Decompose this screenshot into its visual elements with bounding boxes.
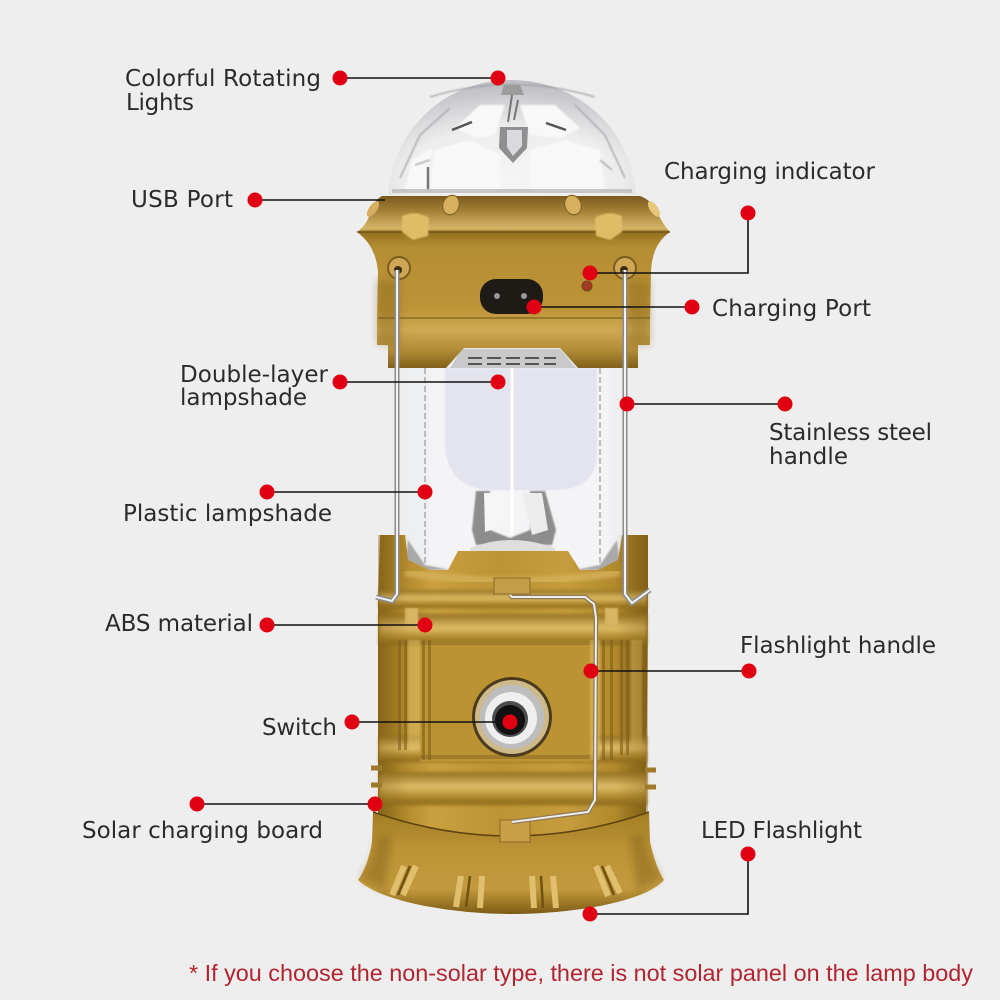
callout: colorful rotating lights (125, 66, 506, 116)
callout: colorful rotating lights: Colorful Rotating (125, 66, 321, 92)
glass lampshade (403, 349, 620, 570)
lantern illustration (357, 80, 670, 914)
charging port socket (480, 279, 543, 314)
flared gold base (358, 812, 664, 914)
callout: USB port (131, 187, 385, 213)
callout: solar charging board (82, 796, 382, 844)
callout: stainless steel handle (620, 396, 932, 470)
callout: flashlight handle: Flashlight handle (740, 633, 936, 659)
callout: charging port: Charging Port (712, 296, 871, 322)
dome light (388, 80, 636, 195)
top gold cap (357, 193, 670, 368)
indicator led (582, 281, 592, 291)
callout: double-layer lampshade: Double-layer (180, 362, 329, 388)
callout: flashlight handle (584, 633, 936, 678)
lower gold body (371, 535, 656, 838)
callout: double-layer lampshade (180, 362, 506, 411)
switch (472, 677, 552, 757)
callout: solar charging board: Solar charging board (82, 818, 323, 844)
callout: switch: Switch (262, 715, 337, 741)
callout: charging indicator: Charging indicator (664, 159, 876, 185)
callout: USB port: USB Port (131, 187, 233, 213)
callout: ABS material (105, 611, 432, 637)
callout: plastic lampshade: Plastic lampshade (123, 501, 332, 527)
callout: LED flashlight (582, 818, 862, 922)
callout: plastic lampshade (123, 484, 432, 527)
callout: double-layer lampshade: lampshade (180, 385, 307, 411)
callout: charging port (526, 296, 871, 322)
callout: stainless steel handle: handle (769, 444, 848, 470)
footnote: * If you choose the non-solar type, there is not solar panel on the lamp body (189, 960, 973, 986)
stainless steel handles (376, 270, 650, 603)
callout: switch (262, 714, 518, 741)
callout: LED flashlight: LED Flashlight (701, 818, 862, 844)
callout: colorful rotating lights: Lights (126, 90, 194, 116)
callout: stainless steel handle: Stainless steel (769, 420, 932, 446)
callout: charging indicator (582, 159, 876, 280)
flashlight handle (510, 595, 596, 822)
callout: ABS material: ABS material (105, 611, 253, 637)
